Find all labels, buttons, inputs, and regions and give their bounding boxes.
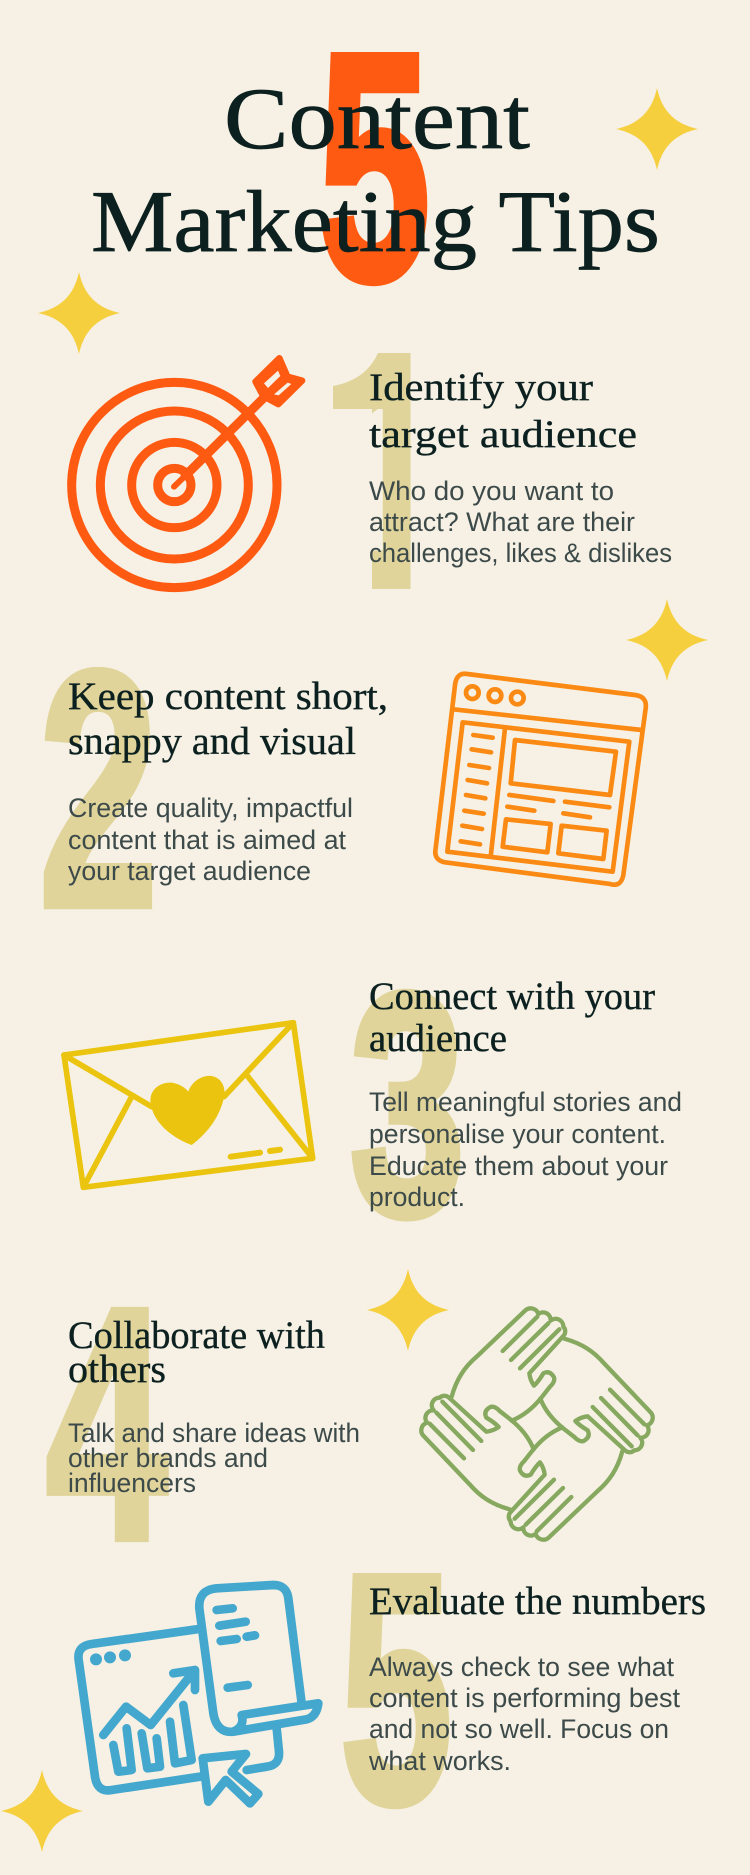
body text: Educate them about your (369, 1151, 668, 1181)
body text: influencers (68, 1468, 196, 1498)
body text (368, 1652, 681, 1776)
panel: tip 2 (39, 602, 646, 977)
heading (68, 1314, 325, 1391)
body text (68, 1418, 360, 1498)
title line 2: Marketing Tips (91, 174, 660, 271)
heading (68, 675, 388, 763)
background numeral 4: 4 (46, 1241, 169, 1609)
panel: tip 3 (64, 927, 682, 1281)
body text: personalise your content. (369, 1119, 666, 1149)
heading (369, 975, 655, 1060)
heading: audience (369, 1017, 507, 1060)
body text: Talk and share ideas with (68, 1418, 360, 1448)
heading: Identify your (369, 366, 593, 409)
heading (369, 366, 637, 456)
body text: Tell meaningful stories and (369, 1087, 682, 1117)
panel: tip 1 (67, 353, 672, 592)
body text: attract? What are their (369, 507, 635, 537)
body text (369, 1087, 682, 1212)
body text: challenges, likes & dislikes (369, 538, 672, 568)
body text: what works. (368, 1746, 511, 1776)
background numeral 1: 1 (322, 286, 475, 660)
heading: snappy and visual (68, 720, 356, 763)
title block (91, 0, 660, 349)
body text (369, 476, 672, 568)
heading: Evaluate the numbers (369, 1580, 706, 1623)
panel: tip 4 (46, 1241, 653, 1609)
panel: tip 5 (78, 1506, 706, 1872)
body text: and not so well. Focus on (369, 1714, 669, 1744)
icon: target with arrow (72, 358, 302, 588)
background numeral 1 (333, 353, 410, 589)
body text: product. (369, 1182, 465, 1212)
heading: others (68, 1348, 166, 1391)
icon: four interlocking hands (421, 1308, 653, 1540)
body text: Always check to see what (369, 1652, 675, 1682)
heading: target audience (369, 413, 637, 456)
heading: Connect with your (369, 975, 655, 1018)
sparkle star top right (616, 88, 698, 170)
body text (68, 793, 353, 886)
background numeral 5: 5 (340, 1506, 452, 1872)
body text: content that is aimed at (68, 825, 347, 855)
body text: Create quality, impactful (68, 793, 353, 823)
sparkle star left (38, 272, 120, 354)
sparkle star middle right (626, 599, 708, 681)
background numeral 2: 2 (39, 602, 158, 977)
sparkle star bottom left (1, 1770, 83, 1852)
icon: analytics dashboard (78, 1585, 318, 1803)
icon: browser window (435, 674, 646, 885)
sparkle star centre (367, 1269, 449, 1351)
body text: your target audience (68, 856, 311, 886)
heading: Collaborate with (68, 1314, 325, 1357)
heading: Keep content short, (68, 675, 388, 718)
body text: Who do you want to (369, 476, 614, 506)
body text: other brands and (68, 1443, 268, 1473)
background numeral 3: 3 (350, 927, 465, 1281)
title line 1: Content (224, 71, 530, 168)
body text: content is performing best (369, 1683, 681, 1713)
icon: envelope with heart (64, 1023, 313, 1187)
